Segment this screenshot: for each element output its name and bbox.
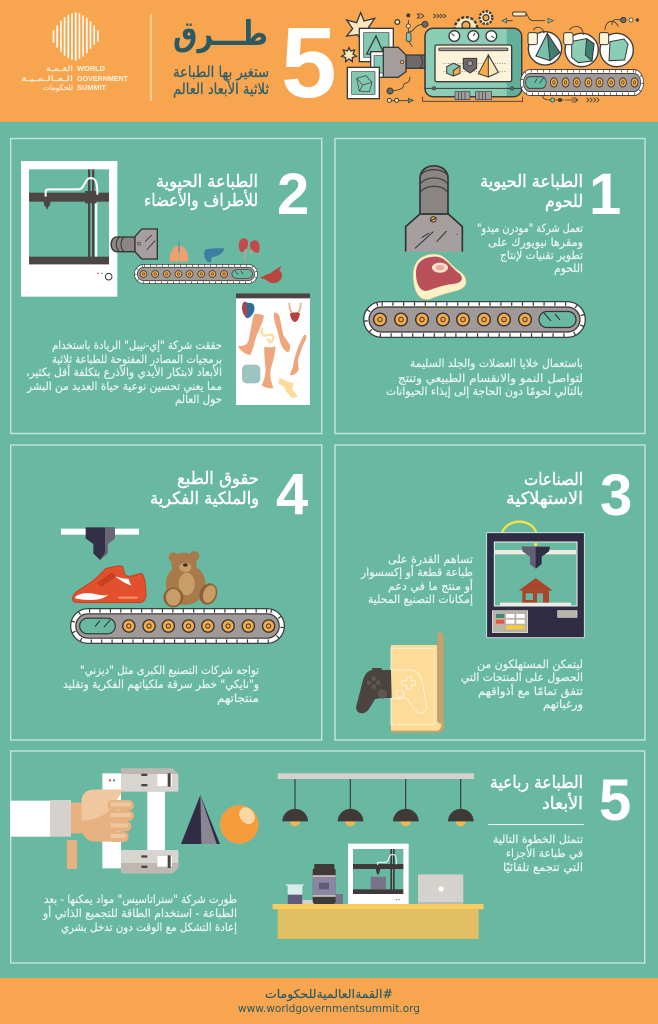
heading: 5 ways: ستغير بها الطباعة [173, 63, 269, 81]
number 1: 1 [589, 162, 621, 227]
text: e-NABLE: حول العالم [175, 392, 222, 407]
panel 2: limbs and organs [11, 138, 322, 434]
heading 5: الأبعاد [542, 793, 583, 814]
text: e-NABLE: مما يعني تحسين نوعية حياة العديد من البشر [26, 379, 222, 394]
conveyor belt flipped [71, 609, 284, 643]
logo: World Government Summit: SUMMIT [77, 85, 107, 92]
text: e-NABLE: برمجيات المصادر المفتوحة للطباعة ثلاثية [52, 352, 222, 367]
number 5: 5 [599, 768, 631, 833]
heading: 5 ways [173, 7, 337, 119]
text: muscle cells: باستعمال خلايا العضلات والجلد السليمة [410, 356, 583, 371]
icon: print head [406, 166, 462, 252]
icon: game controller blueprint [356, 632, 444, 733]
text: Stratasys: إعادة التشكل مع الوقت دون تدخل بشري [61, 920, 237, 935]
text: Stratasys: طورت شركة "ستراتاسيس" مواد يمكنها - بعد [44, 892, 237, 907]
heading: 5 ways: ثلاثية الأبعاد العالم [173, 79, 269, 98]
conveyor belt small [134, 264, 258, 284]
logo: World Government Summit: القـمـة [46, 64, 73, 73]
heading 1 [480, 172, 583, 212]
text: Disney and Nike: و"نايكي" خطر سرقة ملكياتهم الفكرية وتقليد [63, 677, 259, 692]
text: consumers: الحصول على المنتجات التي [461, 670, 583, 685]
text: Modern Meadow [477, 221, 583, 276]
conveyor belt [364, 302, 585, 337]
heading 4: والملكية الفكرية [150, 489, 259, 509]
text: next step: تتمثل الخطوة التالية [493, 832, 583, 847]
text: Modern Meadow: اللحوم [554, 261, 583, 276]
heading 1: الطباعة الحيوية [480, 172, 583, 192]
text: muscle cells: بالتالي لحومًا دون الحاجة إلى إيذاء الحيوانات [386, 384, 583, 399]
number 4: 4 [276, 462, 308, 527]
panel 1: bioprinting meat [335, 138, 645, 434]
text: consumers: تتفق تمامًا مع أذواقهم [478, 683, 583, 699]
footer: #القمةالعالميةللحكومات [265, 987, 393, 1002]
text: Modern Meadow: ومقرها نيويورك على [488, 235, 583, 250]
text: consumers: ليتمكن المستهلكون من [477, 657, 583, 672]
text: muscle cells [386, 356, 583, 399]
heading 3: الاستهلاكية [506, 489, 583, 509]
text: consumers: ورغباتهم [543, 697, 583, 712]
icon: nozzle [61, 527, 139, 560]
heading 5 [490, 773, 583, 814]
footer [0, 978, 658, 1024]
icon: horizontal print head [111, 229, 157, 259]
number 2: 2 [277, 162, 309, 227]
text: Modern Meadow: تعمل شركة "مودرن ميدو" [477, 221, 583, 236]
heading 1: للحوم [545, 192, 583, 212]
text: next step: التي تتجمع تلقائيًا [503, 860, 583, 874]
text: consumers [461, 657, 583, 712]
illustration: lab desk with hanging lamps [273, 773, 484, 939]
heading 2: الطباعة الحيوية [156, 172, 258, 192]
text: next step: في طباعة الأجزاء [506, 846, 583, 861]
heading 4: حقوق الطبع [177, 469, 259, 489]
illustration: hand holding part [10, 768, 178, 873]
text: e-NABLE: حققت شركة "إي-نيبل" الريادة باستخدام [52, 338, 222, 353]
text: print a part: طباعة قطعة أو إكسسوار [360, 564, 473, 580]
heading 2 [144, 172, 258, 211]
text: print a part: تساهم القدرة على [388, 552, 473, 567]
footer: www.worldgovernmentsummit.org [238, 1002, 420, 1015]
icon: desktop 3D printer [487, 522, 584, 638]
panel 4: copyright [11, 445, 322, 740]
icon: teddy bear [163, 551, 220, 607]
text: Disney and Nike [63, 663, 259, 705]
number 3: 3 [600, 463, 632, 528]
heading 3 [506, 470, 583, 509]
heading 3: الصناعات [524, 470, 583, 490]
icons: pyramid and sphere [181, 795, 259, 844]
logo: World Government Summit: GOVERNMENT [77, 76, 129, 83]
header band [0, 0, 658, 122]
text: Stratasys: الطباعة - استخدام الطاقة للتجميع الذاتي أو [42, 905, 237, 921]
text: Disney and Nike: تواجه شركات التصنيع الكبرى مثل "ديزني" [80, 663, 259, 678]
text: e-NABLE: الأبعاد لابتكار الأيدي والأذرع بتكلفة أقل بكثير، [26, 364, 222, 380]
heading 2: للأطراف والأعضاء [144, 190, 258, 211]
text: muscle cells: لتواصل النمو والانقسام الطبيعي وتنتج [398, 371, 583, 386]
illustration: 3D printing machine [342, 11, 638, 103]
text: print a part: إمكانات التصنيع المحلية [368, 592, 473, 606]
text: Disney and Nike: منتجاتهم [217, 691, 259, 705]
text: Modern Meadow: تطوير تقنيات لإنتاج [500, 248, 583, 263]
panel 3: consumer industries [335, 445, 645, 740]
heading 5: الطباعة رباعية [490, 773, 583, 793]
text: Stratasys [42, 892, 237, 935]
icon: printer [21, 161, 117, 297]
icons: organs [170, 238, 282, 283]
logo: World Government Summit: WORLD [77, 66, 105, 73]
text: next step [493, 832, 583, 874]
text: print a part [360, 552, 473, 606]
icon: meat [413, 254, 466, 299]
heading: 5 ways: 5 [281, 7, 337, 119]
heading 4 [150, 469, 259, 509]
text: e-NABLE [26, 338, 222, 407]
panel 5: 4D printing [10, 751, 645, 963]
text: print a part: أو منتج ما في دعم [388, 578, 473, 594]
logo: World Government Summit: الـعـالـمـيـة [21, 74, 73, 83]
logo: World Government Summit [21, 13, 129, 92]
poster: printed body parts [236, 293, 310, 405]
logo: World Government Summit: للحكومات [43, 83, 73, 92]
heading: 5 ways: طـــرق [173, 14, 268, 54]
icon: red sneaker [73, 566, 146, 603]
